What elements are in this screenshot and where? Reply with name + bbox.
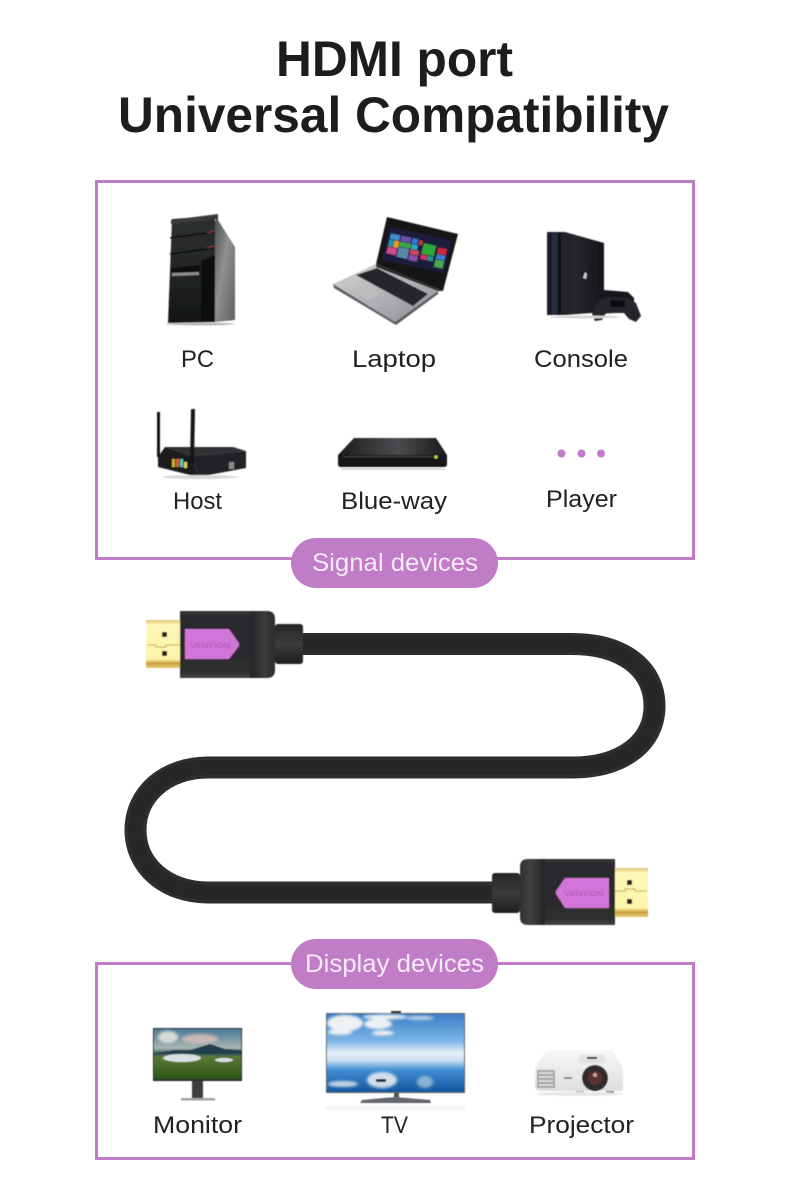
connector: top left plug	[146, 611, 303, 678]
connector: top left plug: VENTION	[190, 643, 230, 650]
cable line	[136, 644, 654, 892]
icon: blu-ray player	[338, 438, 447, 470]
badge: display devices: Display devices	[305, 950, 484, 978]
icon: TV	[326, 1011, 465, 1110]
title: HDMI port	[276, 31, 513, 87]
icon: host box with antennas	[157, 409, 246, 479]
title: Universal Compatibility	[118, 87, 669, 143]
HDMI cable	[136, 611, 654, 925]
title	[118, 31, 669, 143]
label: PC: PC	[181, 346, 214, 373]
icon: monitor	[153, 1028, 242, 1100]
icon: game console	[547, 232, 641, 322]
badge: signal devices	[291, 538, 498, 588]
label: Laptop: Laptop	[352, 346, 436, 373]
icon: PC tower	[166, 214, 235, 326]
label: Monitor: Monitor	[153, 1112, 242, 1139]
label: Blue-way: Blue-way	[341, 488, 447, 515]
connector: bottom right plug	[492, 859, 648, 925]
label: Projector: Projector	[529, 1112, 634, 1139]
icon: more dots	[558, 450, 605, 458]
icon: laptop	[333, 217, 458, 325]
label: Player: Player	[546, 486, 617, 513]
badge: display devices	[291, 939, 498, 989]
label: Host: Host	[173, 488, 222, 515]
icon: projector	[535, 1050, 624, 1096]
panel: display devices	[96, 964, 694, 1158]
connector: bottom right plug: VENTION	[564, 891, 604, 898]
panel: signal devices	[96, 182, 694, 558]
label: Console: Console	[534, 346, 628, 373]
badge: signal devices: Signal devices	[312, 549, 478, 577]
label: TV: TV	[381, 1112, 408, 1139]
